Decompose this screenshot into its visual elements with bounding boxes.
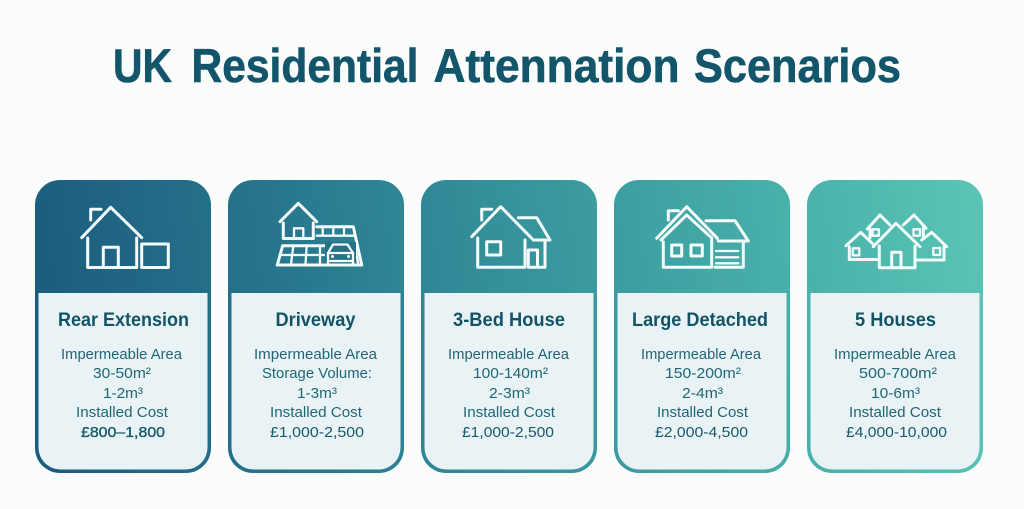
details: 3-Bed House: 100-140m² [473,365,548,382]
card background [421,180,597,473]
details: Large Detached [641,346,762,441]
card body [810,293,980,470]
details: Driveway [254,346,378,441]
card background [614,180,790,473]
card background [228,180,404,473]
card body [38,293,208,470]
card body [424,293,594,470]
title: Residential [192,39,418,92]
details: 3-Bed House: 2-3m³ [489,385,530,402]
details: Rear Extension: Impermeable Area [61,346,183,363]
details: Rear Extension: £800–1,800 [81,424,165,441]
details: 5 Houses: 500-700m² [859,365,937,382]
details: 5 Houses [834,346,957,441]
details: Large Detached: Installed Cost [657,404,749,421]
card body [618,293,786,470]
heading: Rear Extension: Rear Extension [58,310,189,331]
icon: large detached house with garage [657,207,748,267]
details: Driveway: £1,000-2,500 [270,424,364,441]
details: 3-Bed House: Installed Cost [463,404,556,421]
panel: Large Detached [614,180,790,473]
heading: Large Detached: Large Detached [632,310,768,331]
details: Driveway: 1-3m³ [297,385,337,402]
details: 5 Houses: £4,000-10,000 [846,424,947,441]
icon: house with rear extension [82,207,168,268]
panel: Rear Extension [35,180,211,473]
details: Driveway: Impermeable Area [254,346,378,363]
heading: Driveway: Driveway [276,310,356,331]
details: 3-Bed House: Impermeable Area [448,346,570,363]
details: 5 Houses: Impermeable Area [834,346,957,363]
title [113,39,901,92]
card body [232,293,400,470]
details: Rear Extension [61,346,183,441]
panel: Driveway [228,180,404,473]
title: Scenarios [694,39,901,92]
details: Large Detached: Impermeable Area [641,346,762,363]
title: Attennation [434,39,680,92]
details: 5 Houses: 10-6m³ [871,385,920,402]
panel: 3-Bed House [421,180,597,473]
details: Large Detached: 150-200m² [665,365,741,382]
details: 3-Bed House [448,346,570,441]
details: 5 Houses: Installed Cost [849,404,942,421]
details: Rear Extension: Installed Cost [76,404,169,421]
heading: 3-Bed House: 3-Bed House [453,310,565,331]
heading: 5 Houses: 5 Houses [855,310,936,331]
details: Rear Extension: 1-2m³ [103,385,143,402]
panel: 5 Houses [807,180,983,473]
card background [35,180,211,473]
card background [807,180,983,473]
details: 3-Bed House: £1,000-2,500 [462,424,554,441]
details: Rear Extension: 30-50m² [93,365,151,382]
details: Driveway: Installed Cost [270,404,363,421]
icon: house with paved driveway and car [277,203,362,267]
details: Large Detached: 2-4m³ [682,385,723,402]
details: Driveway: Storage Volume: [262,365,372,382]
title: UK [113,39,172,92]
details: Large Detached: £2,000-4,500 [655,424,748,441]
icon: three-bed house [472,207,550,267]
icon: cluster of five houses [846,215,947,268]
